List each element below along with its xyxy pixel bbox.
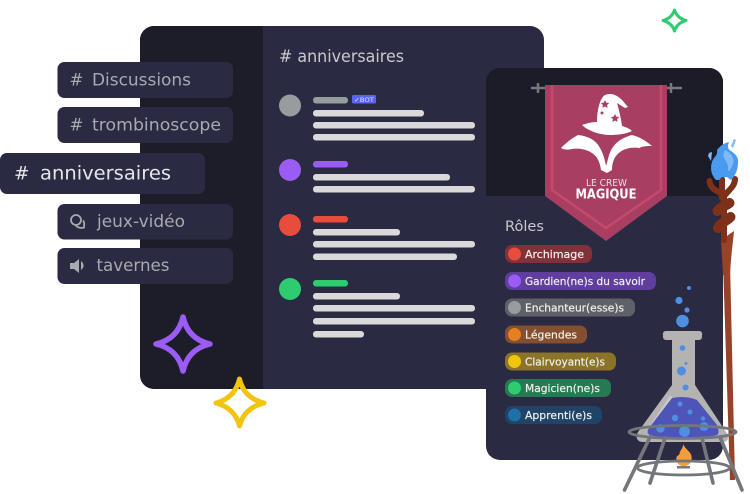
role: Archimage [505, 245, 592, 263]
channel heading: # anniversaires [279, 47, 404, 66]
role: Apprenti [505, 406, 602, 424]
role: Légendes: Légendes [525, 328, 577, 342]
channel chip: trombinoscope: trombinoscope [92, 116, 221, 134]
message 3 [279, 214, 475, 260]
message 4 [279, 278, 475, 338]
channel chip: jeux-vidéo [58, 204, 233, 240]
roles list [505, 245, 656, 424]
icon: blue flame [708, 139, 738, 180]
message 1 [279, 94, 475, 140]
role: Enchanteur [505, 298, 635, 316]
icon: yellow sparkle [216, 379, 264, 426]
channel chip: anniversaires active: # [14, 164, 30, 184]
flask liquid [648, 397, 718, 439]
flame [676, 444, 692, 466]
role: Archimage: Archimage [525, 248, 584, 261]
role: Gardien: Gardien(ne)s du savoir [525, 275, 645, 288]
icon: wizard staff [708, 139, 738, 480]
channel chip: Discussions: Discussions [92, 70, 191, 90]
banner rod [531, 83, 682, 93]
flask body [637, 331, 728, 442]
message 2 [279, 159, 475, 192]
bubbles in flask [656, 345, 708, 437]
channel chip: Discussions [58, 62, 233, 98]
role: Gardien [505, 272, 656, 290]
role: Apprenti: Apprenti(e)s [525, 409, 592, 422]
banner [545, 85, 667, 241]
role: Magicien: Magicien(ne)s [525, 382, 600, 395]
icon: open book [561, 135, 652, 173]
icon: chat bubbles [71, 215, 84, 228]
channel chip: anniversaires active: anniversaires [40, 164, 171, 184]
banner text: LE CREW [586, 178, 627, 189]
channel chip: trombinoscope: # [70, 116, 83, 134]
role: Magicien [505, 379, 611, 397]
stand [624, 426, 742, 490]
panel: main chat window [140, 26, 544, 389]
channel chip: tavernes [58, 248, 233, 284]
channel chip: tavernes: tavernes [96, 256, 170, 275]
panel: server card [486, 68, 723, 460]
channel chip: jeux-vidéo: jeux-vidéo [96, 212, 185, 231]
icon: purple sparkle [156, 317, 210, 371]
icon: speaker [70, 259, 84, 273]
icon: flask on stand [624, 286, 742, 490]
role: Enchanteur: Enchanteur(esse)s [525, 302, 624, 314]
icon: wizard hat [582, 94, 632, 135]
banner: MAGIQUE [576, 188, 636, 202]
role: Légendes [505, 326, 587, 344]
role: Clairvoyant: Clairvoyant(e)s [525, 356, 605, 368]
channel chip: anniversaires active [0, 153, 205, 194]
role: Clairvoyant [505, 352, 616, 370]
channel chip: Discussions: # [70, 70, 83, 90]
channel chip: trombinoscope [58, 107, 233, 143]
roles heading: Rôles [505, 219, 544, 235]
message 1: ✓BOT [354, 96, 374, 104]
icon: green sparkle [663, 10, 686, 31]
bubbles above flask [675, 286, 691, 327]
